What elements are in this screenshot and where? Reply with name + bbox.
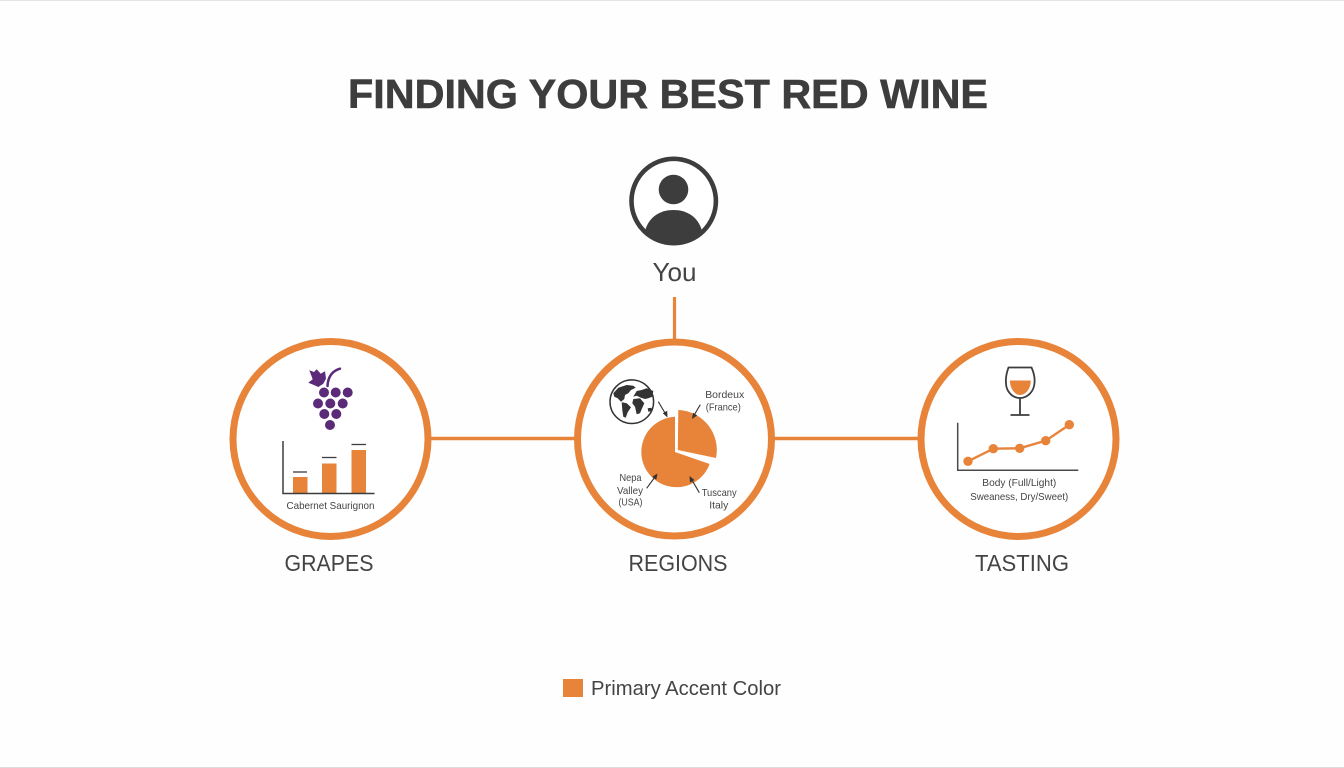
label: Bordeaux: Bordeux (705, 389, 745, 401)
label: Napa Valley: Valley (617, 485, 644, 497)
chart label: tasting axes: Sweaness, Dry/Sweet) (970, 491, 1068, 503)
label: Bordeaux: (France) (706, 402, 741, 414)
heading: grapes: GRAPES (284, 550, 374, 576)
connector: regions to tasting (774, 437, 919, 440)
panel: tasting (921, 342, 1116, 536)
icon: user (632, 159, 716, 244)
line chart: tasting (958, 420, 1078, 470)
arrows: region callouts (647, 402, 700, 493)
chart label: grape variety: Cabernet Saurignon (286, 500, 375, 512)
icon: grapes (308, 369, 353, 430)
label: you: You (652, 257, 696, 287)
legend swatch (563, 679, 583, 697)
icon: wine glass (1006, 368, 1035, 415)
panel ring: tasting (921, 342, 1116, 536)
panel ring: grapes (233, 342, 428, 536)
panel: regions (578, 342, 772, 536)
legend (563, 677, 781, 700)
chart label: tasting axes: Body (Full/Light) (982, 477, 1056, 489)
bar chart: grapes (283, 441, 374, 494)
label: Napa Valley: (USA) (618, 496, 642, 508)
legend label: Primary Accent Color (591, 677, 781, 700)
title: FINDING YOUR BEST RED WINE (348, 71, 988, 117)
label: Napa Valley: Nepa (620, 472, 642, 484)
connector: you to regions (673, 297, 676, 341)
panel: grapes (233, 342, 428, 536)
icon: globe (610, 380, 654, 424)
heading: regions: REGIONS (628, 550, 728, 576)
pie chart: regions (641, 410, 717, 487)
heading: tasting: TASTING (975, 550, 1069, 576)
panel ring: regions (578, 342, 772, 536)
label: Tuscany: Tuscany (702, 487, 737, 499)
label: Tuscany: Italy (709, 500, 729, 512)
connector: grapes to regions (430, 437, 576, 440)
